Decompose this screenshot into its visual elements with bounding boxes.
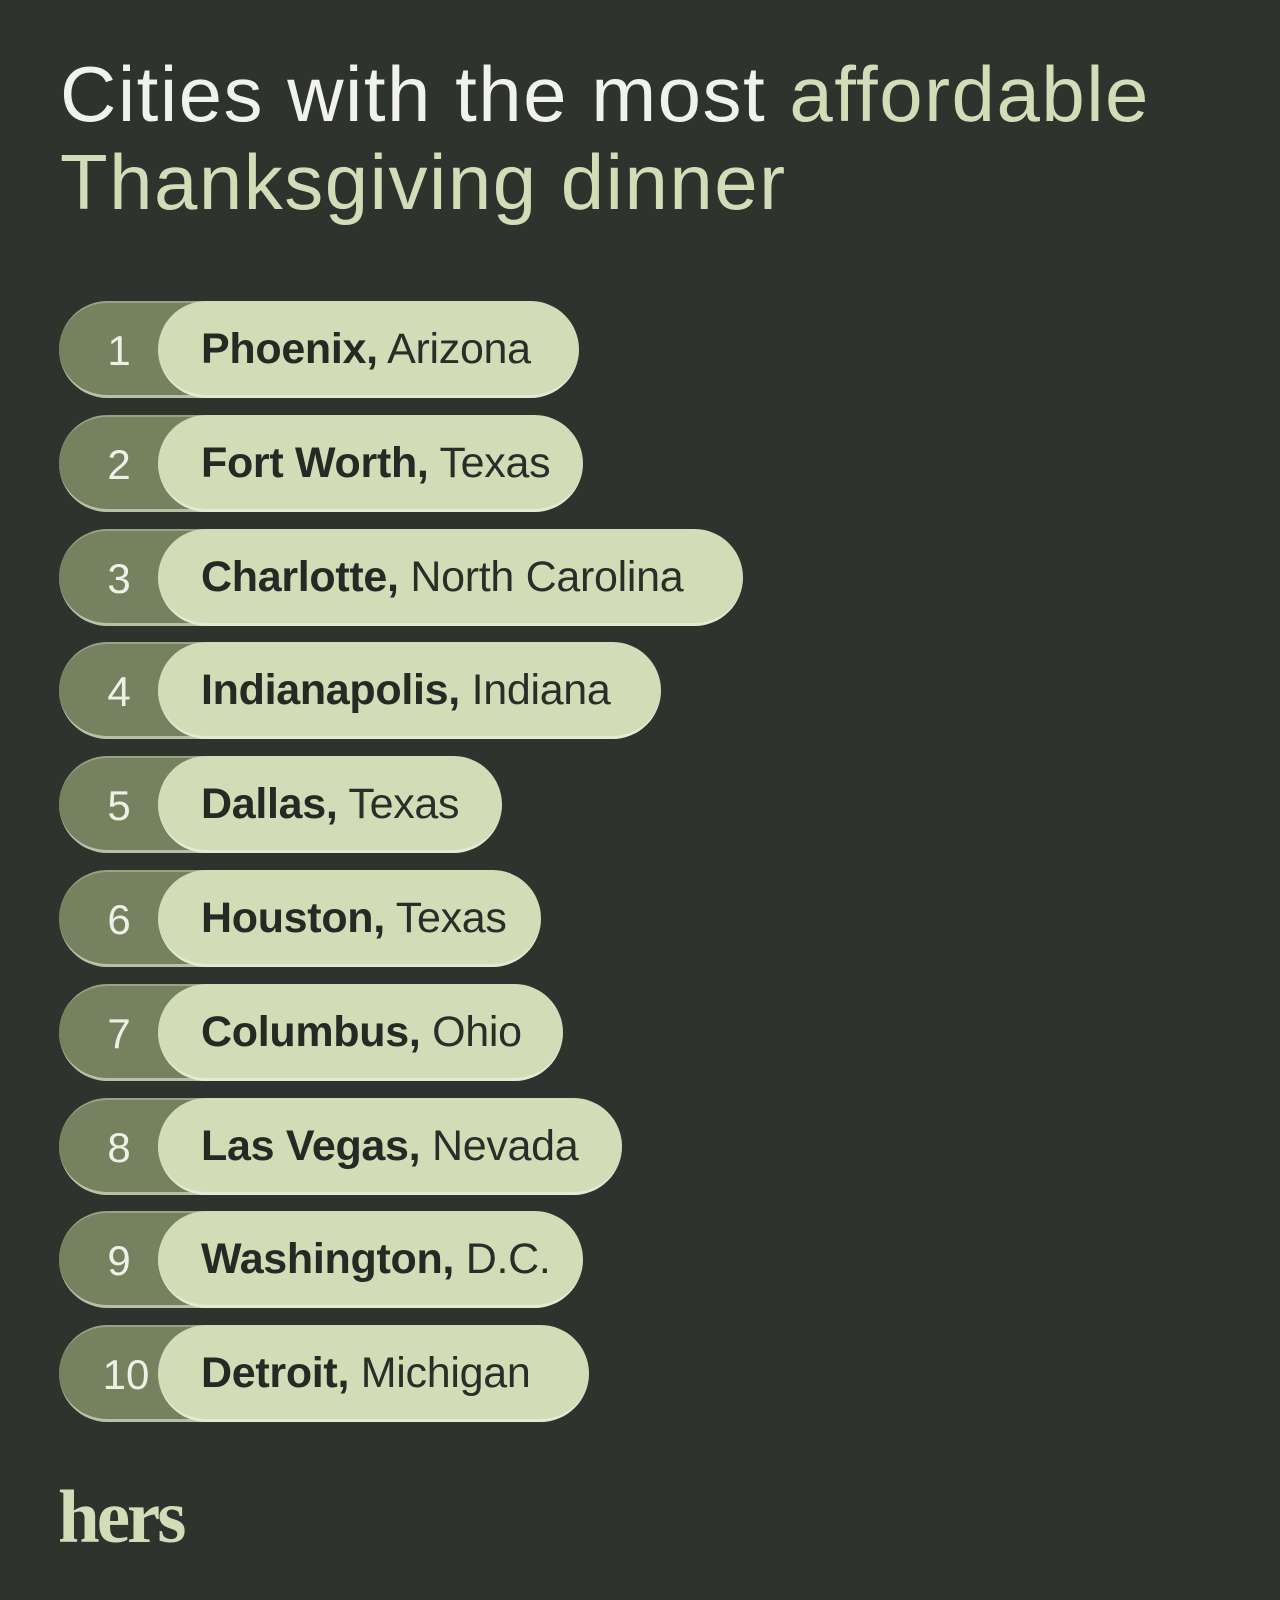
row 9 (59, 1211, 583, 1308)
row 10 (59, 1325, 589, 1422)
row 2 (59, 415, 583, 512)
title: Thanksgiving dinner (60, 138, 787, 226)
row 8 (59, 1098, 622, 1195)
title: Cities with the most affordable (60, 50, 1150, 138)
row 3 (59, 529, 743, 626)
row 7: Columbus, Ohio (201, 1008, 522, 1056)
row 4: 4 (107, 668, 131, 715)
title (60, 50, 1150, 226)
ranking list (59, 301, 743, 1422)
row 2: Fort Worth, Texas (201, 439, 550, 487)
row 7 (59, 984, 563, 1081)
row 2: 2 (107, 441, 131, 488)
row 9: 9 (107, 1237, 131, 1284)
row 5: 5 (107, 782, 131, 829)
row 6: 6 (107, 896, 131, 943)
row 10: Detroit, Michigan (201, 1349, 530, 1397)
row 8: Las Vegas, Nevada (201, 1122, 578, 1170)
row 1: 1 (107, 327, 131, 374)
row 4 (59, 642, 661, 739)
row 1 (59, 301, 579, 398)
row 9: Washington, D.C. (201, 1235, 551, 1283)
row 4: Indianapolis, Indiana (201, 666, 611, 714)
row 5: Dallas, Texas (201, 780, 459, 828)
row 6: Houston, Texas (201, 894, 507, 942)
row 3: Charlotte, North Carolina (201, 553, 683, 601)
logo: hers: hers (58, 1476, 183, 1559)
row 6 (59, 870, 541, 967)
row 5 (59, 756, 502, 853)
row 1: Phoenix, Arizona (201, 325, 531, 373)
row 3: 3 (107, 555, 131, 602)
row 10: 10 (103, 1351, 149, 1398)
row 8: 8 (107, 1124, 131, 1171)
row 7: 7 (107, 1010, 131, 1057)
